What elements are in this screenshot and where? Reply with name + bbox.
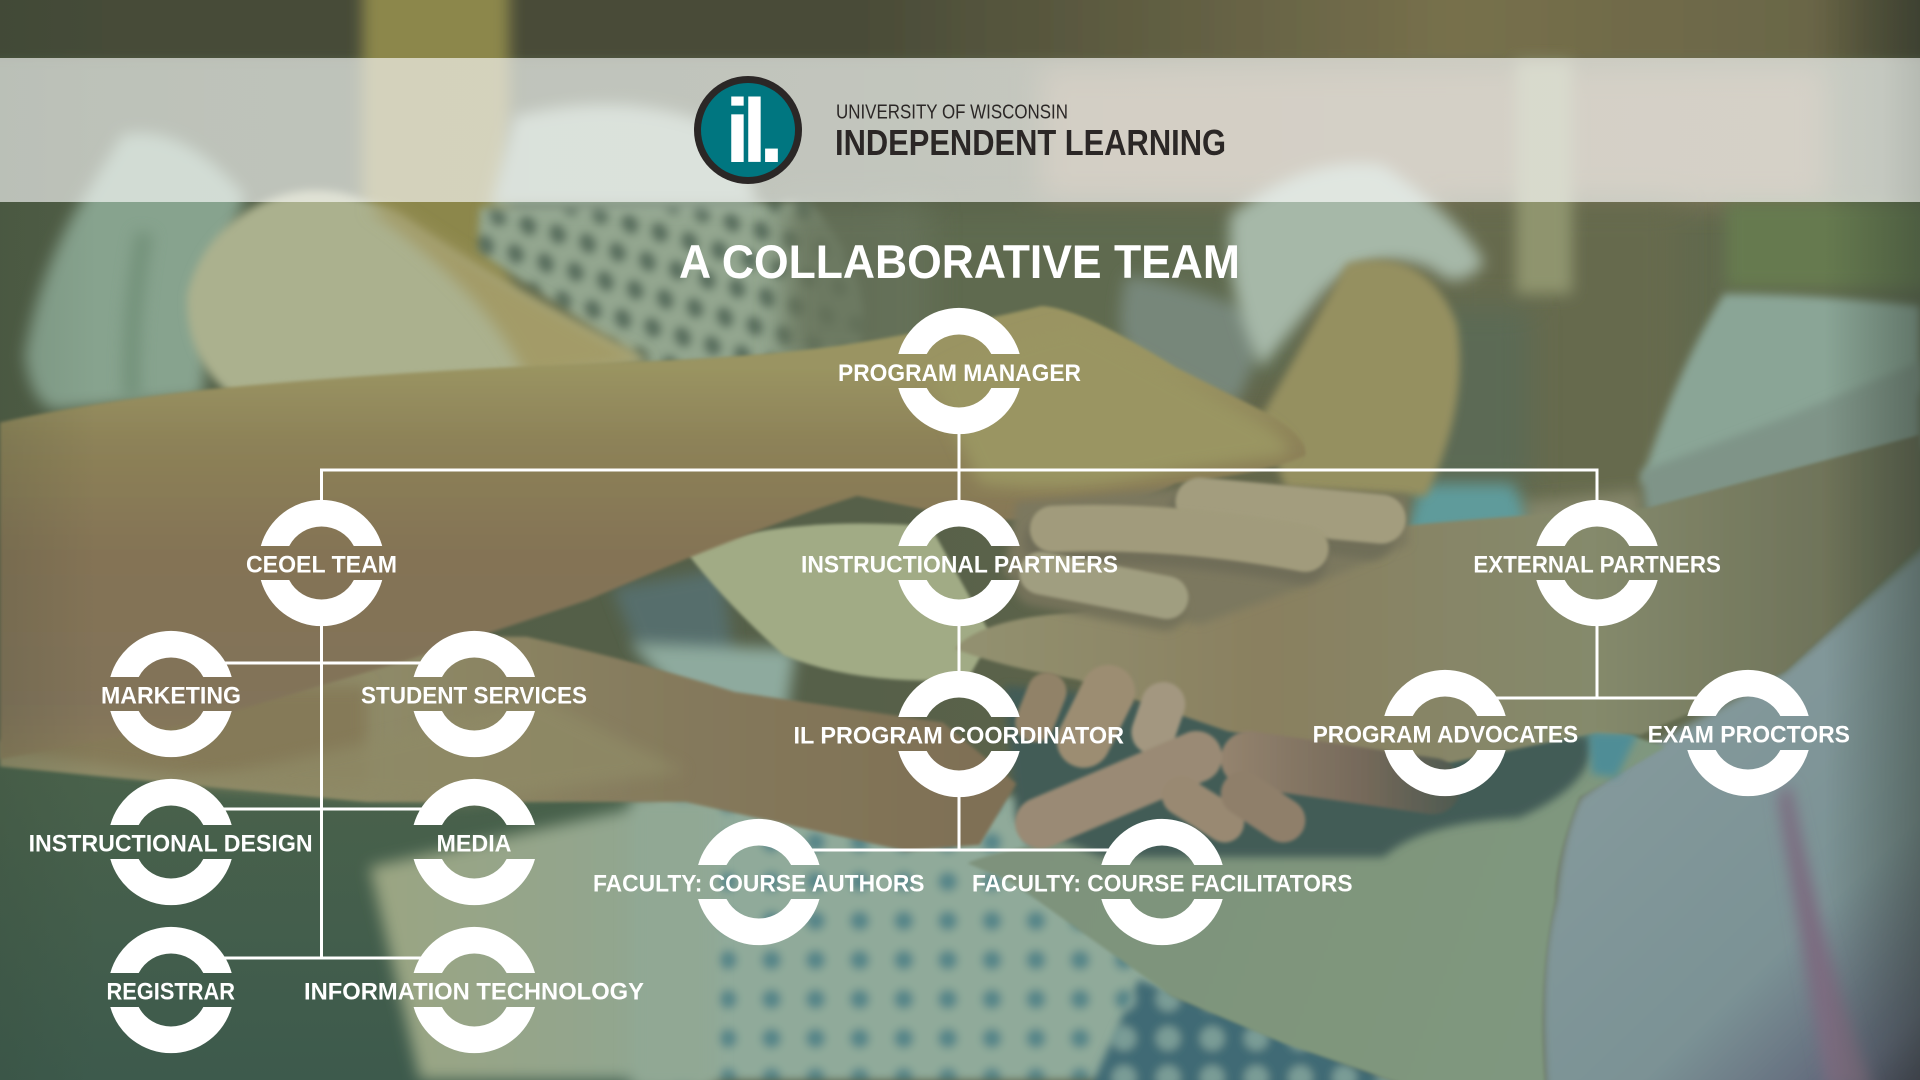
node: instructional design [29,779,313,905]
arm top right [1261,260,1460,496]
node: IL program coordinator: IL PROGRAM COORDINATOR [794,723,1124,750]
node: external partners: EXTERNAL PARTNERS [1473,552,1721,579]
node: faculty course facilitators [972,819,1352,945]
node: program manager: PROGRAM MANAGER [838,360,1081,387]
fingers [1036,502,1381,609]
fabric [655,796,1169,1080]
node: information technology: INFORMATION TECHNOLOGY [304,979,644,1006]
logo icon: il. [694,76,802,184]
node: faculty course authors: FACULTY: COURSE AUTHORS [593,871,924,898]
lower left forearm [0,637,1016,851]
connector lines [220,433,1700,958]
logo wordmark [835,100,1226,163]
checker mid [612,569,735,673]
node: instructional design: INSTRUCTIONAL DESIGN [29,831,313,858]
upper main arm [0,306,1305,759]
node: program advocates [1313,670,1578,796]
dark lower area [0,747,686,1080]
node: marketing: MARKETING [101,683,241,710]
node: instructional partners: INSTRUCTIONAL PARTNERS [801,552,1118,579]
checkered shirt [478,202,863,367]
logo wordmark: INDEPENDENT LEARNING [835,122,1226,163]
node: registrar: REGISTRAR [106,979,235,1006]
title: A COLLABORATIVE TEAM [679,236,1240,289]
back arm [187,190,649,402]
logo wordmark: UNIVERSITY OF WISCONSIN [836,100,1068,124]
knuckle fingers [1035,692,1433,823]
node: external partners [1473,500,1721,626]
upper right forearm and hand [955,435,1920,769]
node: CEOEL team: CEOEL TEAM [246,552,397,579]
node: program advocates: PROGRAM ADVOCATES [1313,722,1578,749]
node: IL program coordinator [794,671,1124,797]
node: student services [361,631,587,757]
node: media: MEDIA [436,831,512,858]
shadow under fingers [1004,484,1408,624]
node: exam proctors: EXAM PROCTORS [1648,722,1850,749]
pale box [370,802,661,1080]
lower right arm [967,722,1665,1080]
pale hand [686,523,992,681]
node: registrar [106,927,235,1053]
node: marketing [101,631,241,757]
node: program manager [838,308,1081,434]
node: student services: STUDENT SERVICES [361,683,587,710]
node: instructional partners [801,500,1118,626]
node: faculty course authors [593,819,924,945]
cloth left [24,133,245,410]
logo icon: il.: il. [725,82,778,182]
shirt right [1543,539,1920,1080]
node: CEOEL team [246,500,397,626]
knit sleeve [1641,361,1920,514]
node: information technology [304,927,644,1053]
node: exam proctors [1648,670,1850,796]
header band [0,58,1920,202]
node: faculty course facilitators: FACULTY: COURSE FACILITATORS [972,871,1352,898]
node: media [414,779,535,905]
dark hand shadow [1004,686,1592,857]
